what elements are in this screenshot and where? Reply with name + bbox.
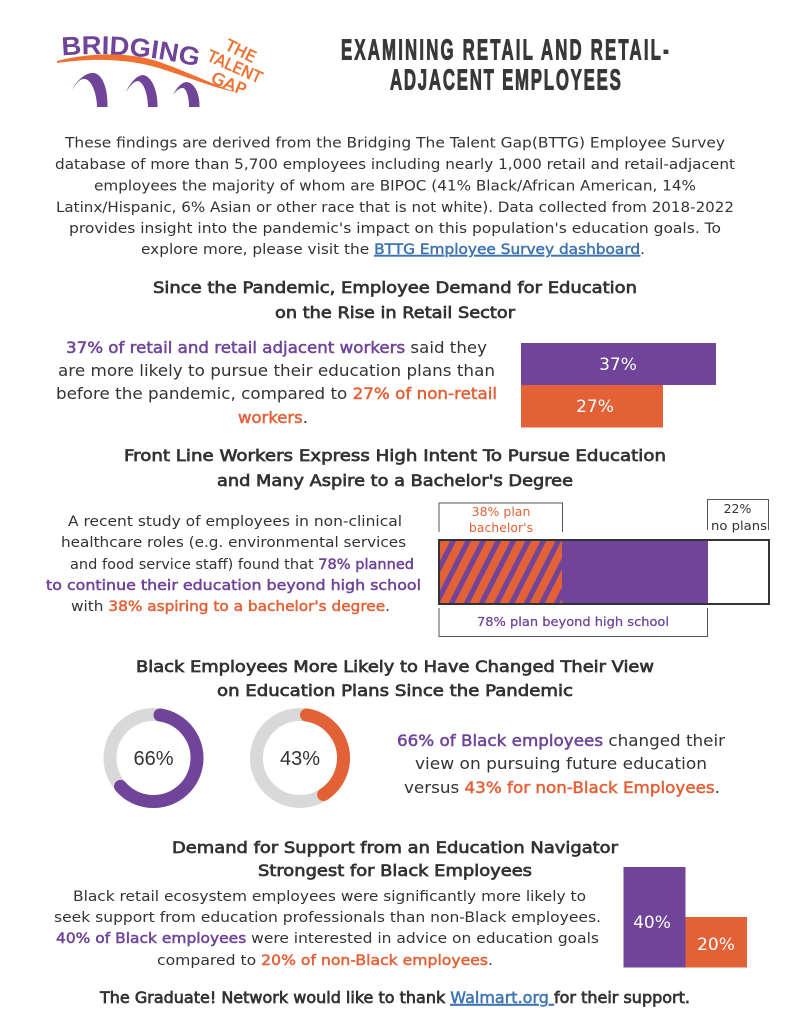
bracket: 78% plan beyond high school: 78% plan beyond high school (477, 614, 669, 629)
section 1 text: 37% of retail and retail adjacent workers said they (66, 338, 487, 357)
section 1 text: workers. (238, 408, 308, 427)
section 2 heading (124, 447, 666, 490)
bracket: 22% no plans: no plans (711, 518, 767, 533)
intro text block: Latinx/Hispanic, 6% Asian or other race that is not white). Data collected from 2018-2022 (56, 199, 734, 216)
section 4 text: 40% of Black employees were interested in advice on education goals (56, 930, 599, 947)
donut chart: 43% (250, 708, 350, 808)
bracket: 22% no plans (708, 500, 768, 533)
section 2 heading: Front Line Workers Express High Intent To Pursue Education (124, 447, 666, 465)
section 2 text: healthcare roles (e.g. environmental services (61, 534, 406, 551)
bar: non-retail 27%: 27% (576, 397, 614, 417)
donut chart: 66% (104, 708, 203, 808)
logo: Bridging The Talent Gap (57, 35, 265, 107)
section 1 text: before the pandemic, compared to 27% of non-retail (56, 384, 497, 403)
logo tagline: The Talent Gap (203, 35, 265, 99)
bracket: 22% no plans: 22% (724, 501, 752, 516)
donut chart: 43%: 43% (280, 748, 320, 770)
column: Black employees 40%: 40% (633, 913, 671, 933)
logo arches (72, 73, 200, 107)
section 3 heading (136, 658, 654, 700)
logo tagline: The Talent Gap: THE (221, 35, 259, 67)
section 2 text: with 38% aspiring to a bachelor's degree . (71, 598, 390, 615)
bar: retail 37%: 37% (599, 355, 637, 375)
section 2 text (46, 513, 421, 615)
bar chart: retail vs non-retail (521, 343, 716, 428)
logo tagline: The Talent Gap: TALENT (203, 46, 265, 87)
section 2 text: A recent study of employees in non-clinical (68, 513, 402, 530)
donut chart: 66%: 66% (133, 748, 174, 770)
section 1 heading (153, 279, 637, 322)
section 3 text: 66% of Black employees changed their (397, 731, 725, 750)
intro text block: database of more than 5,700 employees including nearly 1,000 retail and retail-adjacent (55, 156, 735, 173)
section 1 heading: Since the Pandemic, Employee Demand for Education (153, 279, 637, 297)
section 4 text (54, 888, 601, 969)
section 3 text: versus 43% for non-Black Employees . (404, 778, 720, 797)
bar: retail 37% (521, 343, 716, 385)
intro text block: employees the majority of whom are BIPOC (41% Black/African American, 14% (94, 178, 696, 194)
bar segment: 78% plan beyond high school (439, 540, 708, 604)
section 3 text: view on pursuing future education (415, 754, 707, 773)
section 1 text (56, 338, 497, 427)
section 3 heading: Black Employees More Likely to Have Changed Their View (136, 658, 654, 676)
title: ADJACENT EMPLOYEES (390, 65, 621, 97)
title: EXAMINING RETAIL AND RETAIL- (341, 35, 669, 67)
footer thanks: The Graduate! Network would like to thank Walmart.org for their support. (99, 989, 690, 1007)
intro text block: explore more, please visit the BTTG Employee Survey dashboard . (141, 241, 645, 258)
column: non-Black employees 20%: 20% (697, 935, 735, 955)
intro text block (55, 134, 735, 258)
bracket: 38% plan bachelor's (439, 503, 562, 535)
logo wordmark: Bridging: BRIDGING (62, 36, 199, 65)
bracket: 38% plan bachelor's: bachelor's (469, 520, 533, 535)
section 4 heading: Strongest for Black Employees (258, 862, 532, 880)
intro text block: These findings are derived from the Bridging The Talent Gap(BTTG) Employee Survey (64, 134, 725, 152)
section 4 text: compared to 20% of non-Black employees . (157, 952, 493, 969)
section 4 heading (172, 839, 619, 880)
bar segment: 38% plan bachelor's, hatched (439, 540, 562, 604)
bracket: 78% plan beyond high school (439, 608, 708, 636)
section 2 text: to continue their education beyond high school (46, 577, 421, 594)
stacked bar chart: education plans (439, 500, 769, 636)
section 4 text: seek support from education professionals than non-Black employees. (54, 909, 601, 926)
section 2 text: and food service staff) found that 78% planned (70, 556, 414, 573)
section 3 heading: on Education Plans Since the Pandemic (217, 682, 573, 700)
column chart: Black vs non-Black interest (624, 867, 747, 968)
bar: non-retail 27% (521, 385, 663, 428)
section 1 heading: on the Rise in Retail Sector (275, 304, 516, 322)
section 2 heading: and Many Aspire to a Bachelor's Degree (217, 472, 573, 490)
title (341, 35, 669, 97)
logo tagline: The Talent Gap: GAP (209, 68, 249, 99)
section 4 text: Black retail ecosystem employees were significantly more likely to (73, 888, 586, 905)
logo swoosh (57, 54, 235, 92)
section 1 text: are more likely to pursue their education plans than (58, 361, 495, 380)
section 4 heading: Demand for Support from an Education Navigator (172, 839, 619, 857)
bracket: 38% plan bachelor's: 38% plan (472, 504, 530, 519)
bar outline (439, 540, 769, 604)
section 3 text (397, 731, 725, 797)
intro text block: provides insight into the pandemic's impact on this population's education goals. To (69, 220, 721, 237)
